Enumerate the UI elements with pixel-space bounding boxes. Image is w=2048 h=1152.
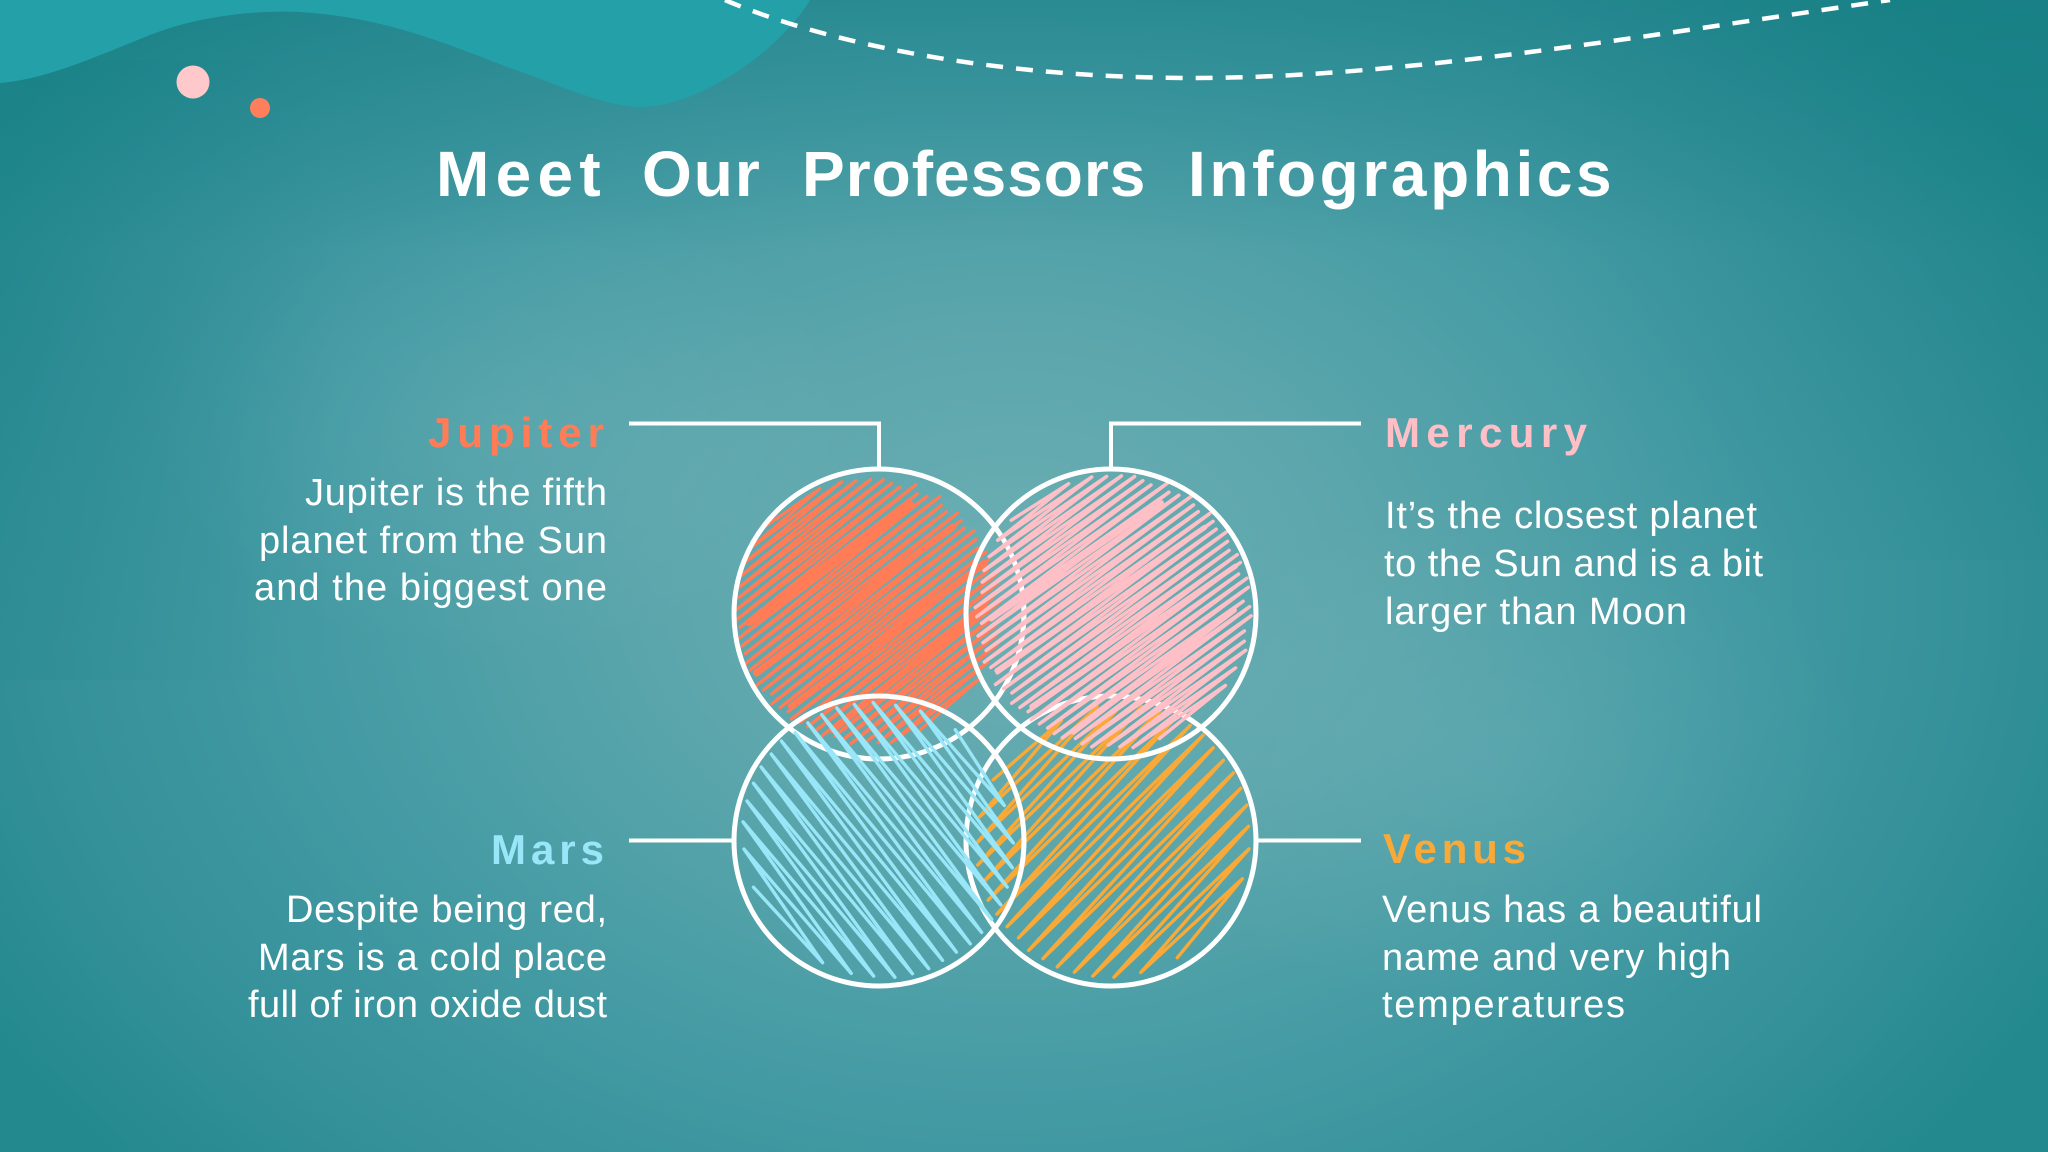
description: Mercury: larger than Moon [1385, 591, 1687, 633]
decorative dot: pink [176, 66, 210, 98]
description: Mars: Despite being red, [286, 889, 607, 931]
label block: Mars [248, 826, 607, 1026]
description: Mars: Mars is a cold place [258, 937, 607, 979]
heading: Mars: Mars [491, 826, 604, 873]
description: Venus [1382, 889, 1762, 1026]
venn circle: Mercury pink scribble [923, 422, 1301, 798]
description: Jupiter: and the biggest one [254, 567, 607, 609]
description: Mercury [1384, 495, 1763, 633]
description: Mars: full of iron oxide dust [248, 984, 607, 1026]
connector: Mars [629, 838, 734, 842]
venn circle: Jupiter orange scribble [682, 427, 1050, 793]
description: Jupiter [254, 472, 607, 609]
label block: Venus [1382, 825, 1762, 1026]
description: Venus: temperatures [1382, 984, 1625, 1026]
venn circle: Venus yellow hatching [925, 652, 1301, 1028]
title: Meet [436, 138, 631, 210]
title: Professors [802, 138, 1165, 210]
title: Infographics [1188, 138, 1615, 210]
description: Venus: Venus has a beautiful [1382, 889, 1762, 931]
heading: Jupiter: Jupiter [428, 409, 604, 456]
decorative dot: orange [250, 98, 270, 118]
connector: Venus [1256, 838, 1361, 842]
decorative dashed curve [725, 0, 1890, 78]
description: Jupiter: planet from the Sun [259, 520, 607, 562]
decorative wave: top left [0, 0, 810, 107]
title: Our [642, 138, 782, 210]
heading: Mercury: Mercury [1385, 409, 1588, 456]
connector: Jupiter [629, 424, 879, 469]
connector: Mercury [1111, 424, 1361, 469]
description: Jupiter: Jupiter is the fifth [305, 472, 607, 514]
description: Venus: name and very high [1382, 937, 1731, 979]
description: Mercury: It’s the closest planet [1385, 495, 1757, 537]
heading: Venus: Venus [1383, 825, 1526, 872]
venn circle: Mars blue hatching [693, 652, 1065, 1028]
description: Mercury: to the Sun and is a bit [1384, 543, 1763, 585]
description: Mars [248, 889, 607, 1026]
label block: Jupiter [254, 409, 607, 609]
label block: Mercury [1384, 409, 1763, 633]
